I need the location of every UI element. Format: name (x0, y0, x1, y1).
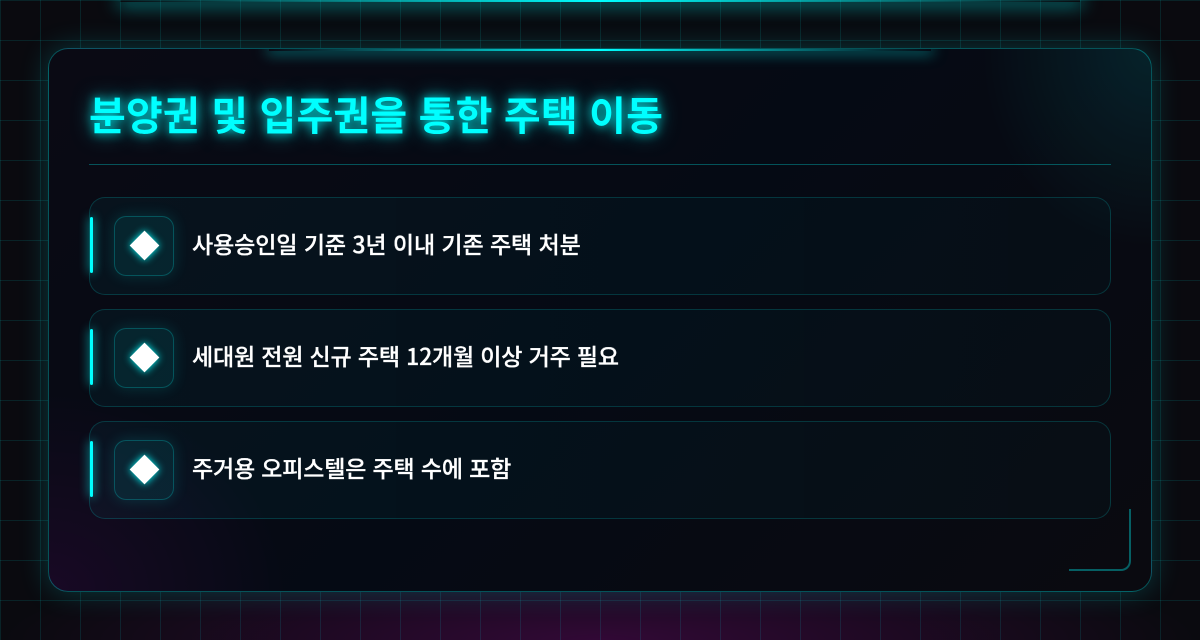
list item 2 (89, 309, 1111, 407)
panel top neon bar (262, 49, 938, 62)
icon: diamond (114, 440, 174, 500)
title divider (89, 164, 1111, 165)
accent bar (90, 441, 93, 497)
accent bar (90, 329, 93, 385)
icon: diamond (114, 328, 174, 388)
item text: 세대원 전원 신규 주택 12개월 이상 거주 필요 (192, 338, 619, 372)
corner bracket (1069, 509, 1131, 571)
top neon bar (120, 0, 1080, 2)
icon: diamond (114, 216, 174, 276)
list item 3 (89, 421, 1111, 519)
list item 1 (89, 197, 1111, 295)
item text: 주거용 오피스텔은 주택 수에 포함 (192, 450, 511, 484)
accent bar (90, 217, 93, 273)
title: 분양권 및 입주권을 통한 주택 이동 (89, 84, 663, 142)
item text: 사용승인일 기준 3년 이내 기존 주택 처분 (192, 226, 581, 260)
panel: main card (48, 48, 1152, 592)
